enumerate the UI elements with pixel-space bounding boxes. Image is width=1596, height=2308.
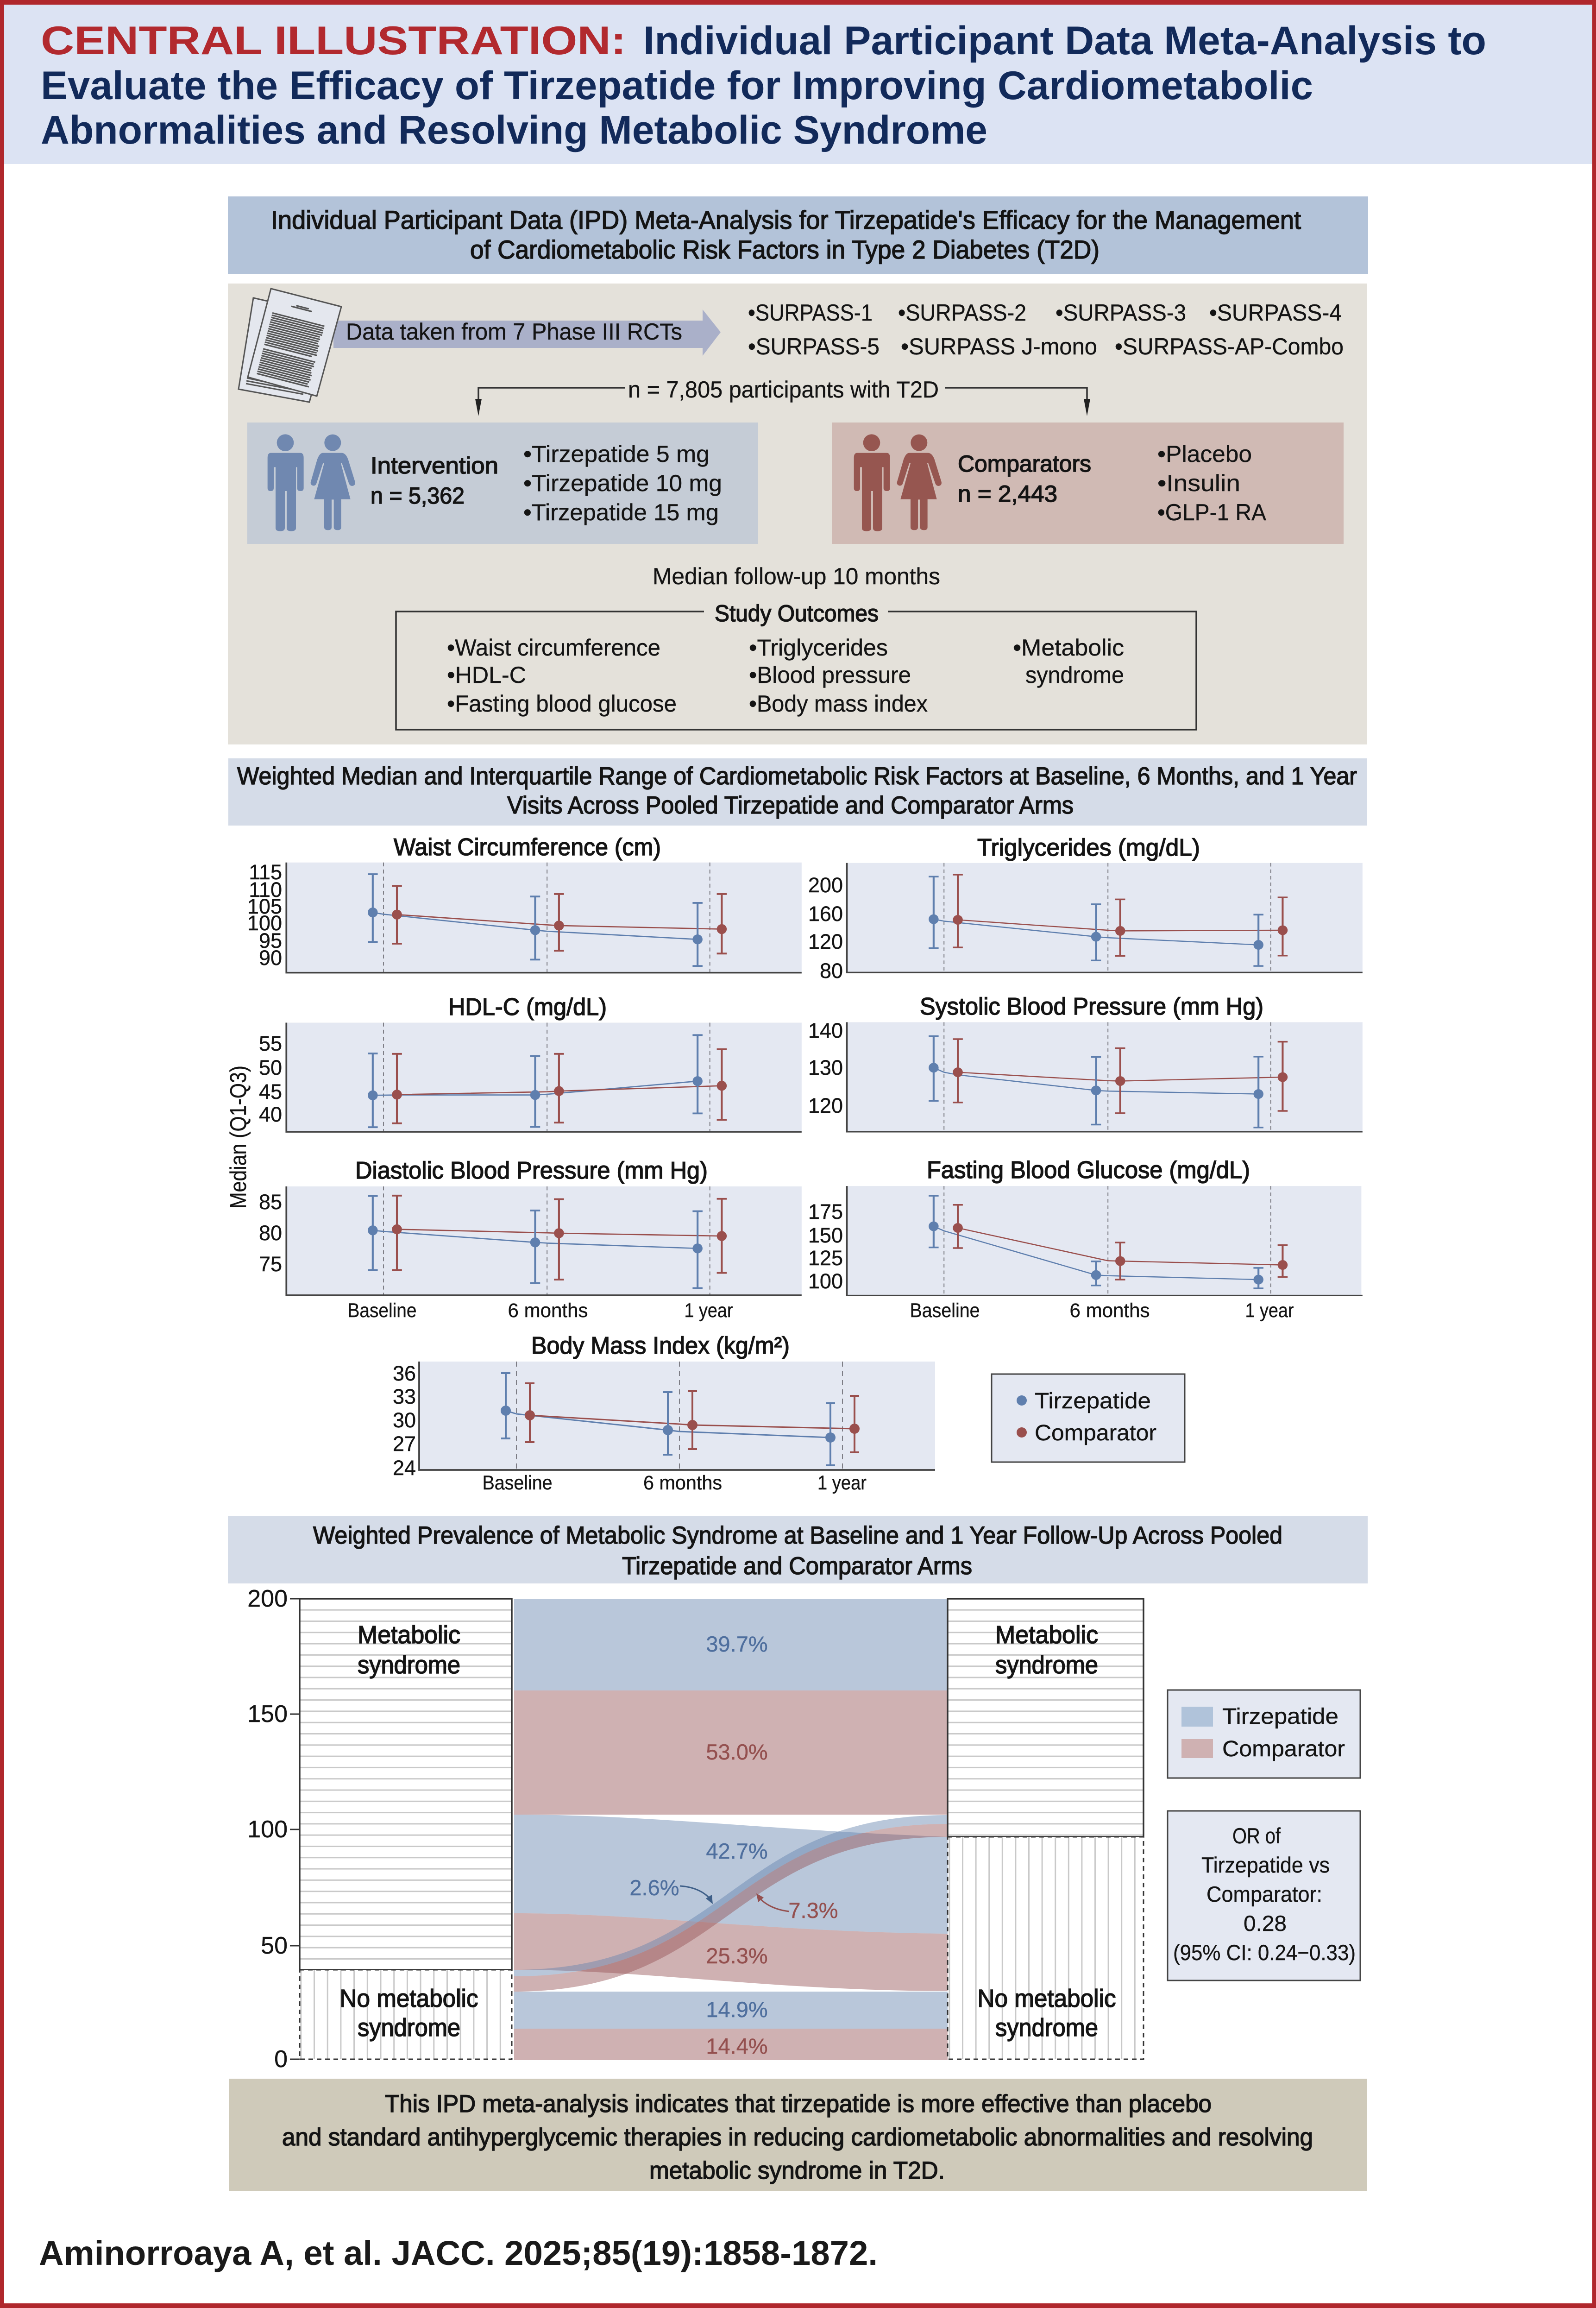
chart: triglycerides: 120 [808,930,843,953]
arrow: participants split: n = 7,805 participants with T2D [628,377,939,403]
chart: waist circumference [247,834,802,973]
bar: baseline: No metabolic [340,1985,478,2012]
chart: diastolic blood pressure: 75 [259,1252,282,1276]
heading: IPD section: Individual Participant Data (IPD) Meta-Analysis for Tirzepatide's Efficacy for the Management [271,205,1301,234]
bar: 1 year [948,1599,1144,2059]
legend: line charts [992,1374,1185,1462]
x axis labels, left column: 1 year [685,1299,733,1322]
title [41,19,1486,152]
flow percentages [706,1632,768,2058]
callout: odds ratio: Comparator: [1206,1882,1322,1906]
intervention arms [523,441,722,525]
icon: people, comparators [854,434,942,531]
chart: triglycerides: 80 [820,959,843,983]
chart: waist circumference: 90 [259,946,282,970]
follow-up text: Median follow-up 10 months [653,563,940,589]
y axis: 0 [274,2046,288,2073]
outcomes list: •Body mass index [749,691,928,717]
y axis [247,1585,300,2073]
legend: line charts: Comparator [1035,1421,1156,1445]
legend: alluvial [1168,1690,1360,1778]
bar: 1 year: syndrome [995,2014,1098,2042]
callout: odds ratio: Tirzepatide vs [1201,1853,1330,1877]
comparator arms: •Placebo [1157,441,1252,467]
callout: odds ratio [1168,1811,1360,1980]
arrow: data taken from RCTs: Data taken from 7 Phase III RCTs [346,319,682,345]
chart: fasting blood glucose: 150 [808,1223,843,1247]
bar: baseline [300,1599,512,2059]
chart: body mass index: Body Mass Index (kg/m²) [531,1332,790,1359]
bar: 1 year: Metabolic [995,1621,1098,1649]
chart: fasting blood glucose: 175 [808,1200,843,1223]
chart: triglycerides: 200 [808,873,843,897]
title: Evaluate the Efficacy of Tirzepatide for Improving Cardiometabolic [41,63,1313,108]
trial list [748,300,1344,359]
y axis label: Median (Q1-Q3) [226,1066,251,1209]
bar: 1 year: syndrome [995,1651,1098,1679]
chart: waist circumference: 100 [247,911,282,935]
callout: 7.3% [756,1893,838,1923]
chart: diastolic blood pressure: 85 [259,1190,282,1214]
outcomes list: syndrome [1025,662,1124,688]
chart: body mass index: 30 [393,1408,416,1432]
flow percentages: 39.7% [706,1632,768,1656]
comparator arms [1157,441,1267,525]
panel: conclusion: metabolic syndrome in T2D. [649,2157,945,2184]
panel: comparators: n = 2,443 [958,481,1057,507]
trial list: •SURPASS-5 [748,334,880,359]
outcomes list: •Metabolic [1013,635,1124,661]
arrow: data taken from RCTs [333,309,721,356]
panel: study outcomes: Study Outcomes [715,600,879,626]
flow percentages: 14.9% [706,1997,768,2022]
chart: body mass index: 36 [393,1362,416,1385]
outcomes list [447,635,1124,717]
callout: odds ratio: OR of [1232,1823,1281,1848]
chart: triglycerides [808,834,1363,983]
chart: HDL-C: 45 [259,1080,282,1104]
chart: body mass index: 33 [393,1385,416,1408]
chart: HDL-C: HDL-C (mg/dL) [448,994,607,1021]
heading: risk factor charts: Weighted Median and Interquartile Range of Cardiometabolic Risk Factors at Baseline, 6 Months, and 1 Year [237,763,1357,790]
panel: study design [228,284,1367,744]
flows [514,1599,948,2060]
outcomes list: •HDL-C [447,662,526,688]
trial list: •SURPASS-AP-Combo [1115,334,1344,359]
flow percentages: 42.7% [706,1839,768,1863]
callout: 7.3%: 7.3% [788,1898,838,1923]
callout: odds ratio: (95% CI: 0.24−0.33) [1173,1940,1356,1965]
chart: waist circumference: 110 [249,878,282,902]
heading: risk factor charts: Visits Across Pooled Tirzepatide and Comparator Arms [507,792,1074,819]
title: Individual Participant Data Meta-Analysis to [643,19,1486,63]
title: CENTRAL ILLUSTRATION: [41,19,626,63]
callout: 2.6%: 2.6% [629,1875,679,1900]
chart: systolic blood pressure: 120 [808,1094,843,1117]
trial list: •SURPASS-2 [898,300,1026,326]
chart: triglycerides: Triglycerides (mg/dL) [977,834,1200,861]
panel: study outcomes [396,600,1196,730]
heading: IPD section [228,196,1368,274]
y axis: 150 [247,1701,288,1728]
intervention arms: •Tirzepatide 5 mg [523,441,710,467]
heading: prevalence chart: Tirzepatide and Comparator Arms [622,1552,972,1580]
title: Abnormalities and Resolving Metabolic Syndrome [41,108,987,152]
chart: systolic blood pressure [808,993,1363,1132]
intervention arms: •Tirzepatide 10 mg [523,470,722,496]
chart: HDL-C: 50 [259,1056,282,1079]
chart: body mass index: 1 year [817,1472,867,1494]
chart: systolic blood pressure: 140 [808,1019,843,1042]
x axis labels, left column: 6 months [508,1299,588,1322]
comparator arms: •GLP-1 RA [1157,499,1267,525]
chart: fasting blood glucose [808,1157,1363,1322]
citation: Aminorroaya A, et al. JACC. 2025;85(19):1858-1872. [39,2234,878,2272]
panel: intervention: Intervention [371,453,498,479]
chart: diastolic blood pressure: 80 [259,1221,282,1245]
panel: conclusion: and standard antihyperglycemic therapies in reducing cardiometabolic abnormalities and resolving [282,2124,1313,2151]
y axis: 200 [247,1585,288,1612]
chart: body mass index [393,1332,935,1494]
chart: body mass index: Baseline [483,1472,552,1494]
comparator arms: •Insulin [1157,470,1240,496]
heading: risk factor charts [228,758,1367,826]
chart: systolic blood pressure: 130 [808,1056,843,1079]
chart: diastolic blood pressure [259,1157,802,1322]
chart: triglycerides: 160 [808,902,843,926]
chart: waist circumference: Waist Circumference (cm) [394,834,661,861]
panel: comparators [832,423,1344,544]
panel: comparators: Comparators [958,451,1091,477]
outcomes list: •Waist circumference [447,635,660,661]
chart: fasting blood glucose: Fasting Blood Glucose (mg/dL) [927,1157,1250,1184]
bar: baseline: syndrome [358,2014,460,2042]
bar: baseline: Metabolic [358,1621,460,1649]
arrow: participants split [475,377,1090,416]
chart: systolic blood pressure: Systolic Blood Pressure (mm Hg) [920,993,1263,1020]
outcomes list: •Triglycerides [749,635,888,661]
x axis labels, left column [347,1299,733,1322]
callout: odds ratio: 0.28 [1244,1911,1287,1936]
chart: fasting blood glucose: 125 [808,1246,843,1270]
chart: diastolic blood pressure: Diastolic Blood Pressure (mm Hg) [355,1157,708,1184]
chart: body mass index: 6 months [643,1472,722,1494]
trial list: •SURPASS J-mono [901,334,1097,359]
flow percentages: 14.4% [706,2034,768,2058]
heading: IPD section: of Cardiometabolic Risk Factors in Type 2 Diabetes (T2D) [470,235,1100,264]
y axis: 50 [261,1932,288,1959]
chart: waist circumference: 115 [249,860,282,884]
legend: line charts: Tirzepatide [1035,1389,1151,1413]
panel: title banner [4,5,1592,164]
chart: body mass index: 24 [393,1456,416,1480]
flow percentages: 53.0% [706,1740,768,1764]
x axis labels, right column [910,1299,1294,1322]
chart: HDL-C: 55 [259,1032,282,1055]
icon: stack of papers [239,289,341,402]
bar: 1 year: No metabolic [977,1985,1116,2012]
x axis labels, right column: Baseline [910,1299,980,1322]
panel: intervention [247,423,758,544]
chart: HDL-C: 40 [259,1103,282,1126]
legend: alluvial: Comparator [1222,1737,1345,1761]
chart: HDL-C [259,994,802,1132]
chart: body mass index: 27 [393,1432,416,1456]
chart: alluvial metabolic syndrome [247,1585,1144,2073]
x axis labels, right column: 6 months [1070,1299,1150,1322]
trial list: •SURPASS-1 [748,300,873,326]
flow percentages: 25.3% [706,1943,768,1968]
outcomes list: •Fasting blood glucose [447,691,677,717]
bar: baseline: syndrome [358,1651,460,1679]
panel: conclusion [229,2079,1367,2191]
y axis: 100 [247,1816,288,1843]
callout: 2.6% [629,1875,713,1904]
panel: conclusion: This IPD meta-analysis indicates that tirzepatide is more effective than placebo [385,2090,1212,2118]
intervention arms: •Tirzepatide 15 mg [523,499,719,525]
trial list: •SURPASS-3 [1056,300,1186,326]
panel: intervention: n = 5,362 [371,483,465,509]
icon: people, intervention [268,434,355,531]
heading: prevalence chart: Weighted Prevalence of Metabolic Syndrome at Baseline and 1 Year Follow-Up Across Pooled [313,1522,1282,1549]
x axis labels, right column: 1 year [1245,1299,1294,1322]
outcomes list: •Blood pressure [749,662,911,688]
chart: fasting blood glucose: 100 [808,1269,843,1293]
trial list: •SURPASS-4 [1209,300,1342,326]
legend: alluvial: Tirzepatide [1222,1704,1338,1729]
heading: prevalence chart [228,1516,1368,1583]
chart: waist circumference: 105 [247,895,282,918]
chart: waist circumference: 95 [259,929,282,952]
x axis labels, left column: Baseline [347,1299,417,1322]
